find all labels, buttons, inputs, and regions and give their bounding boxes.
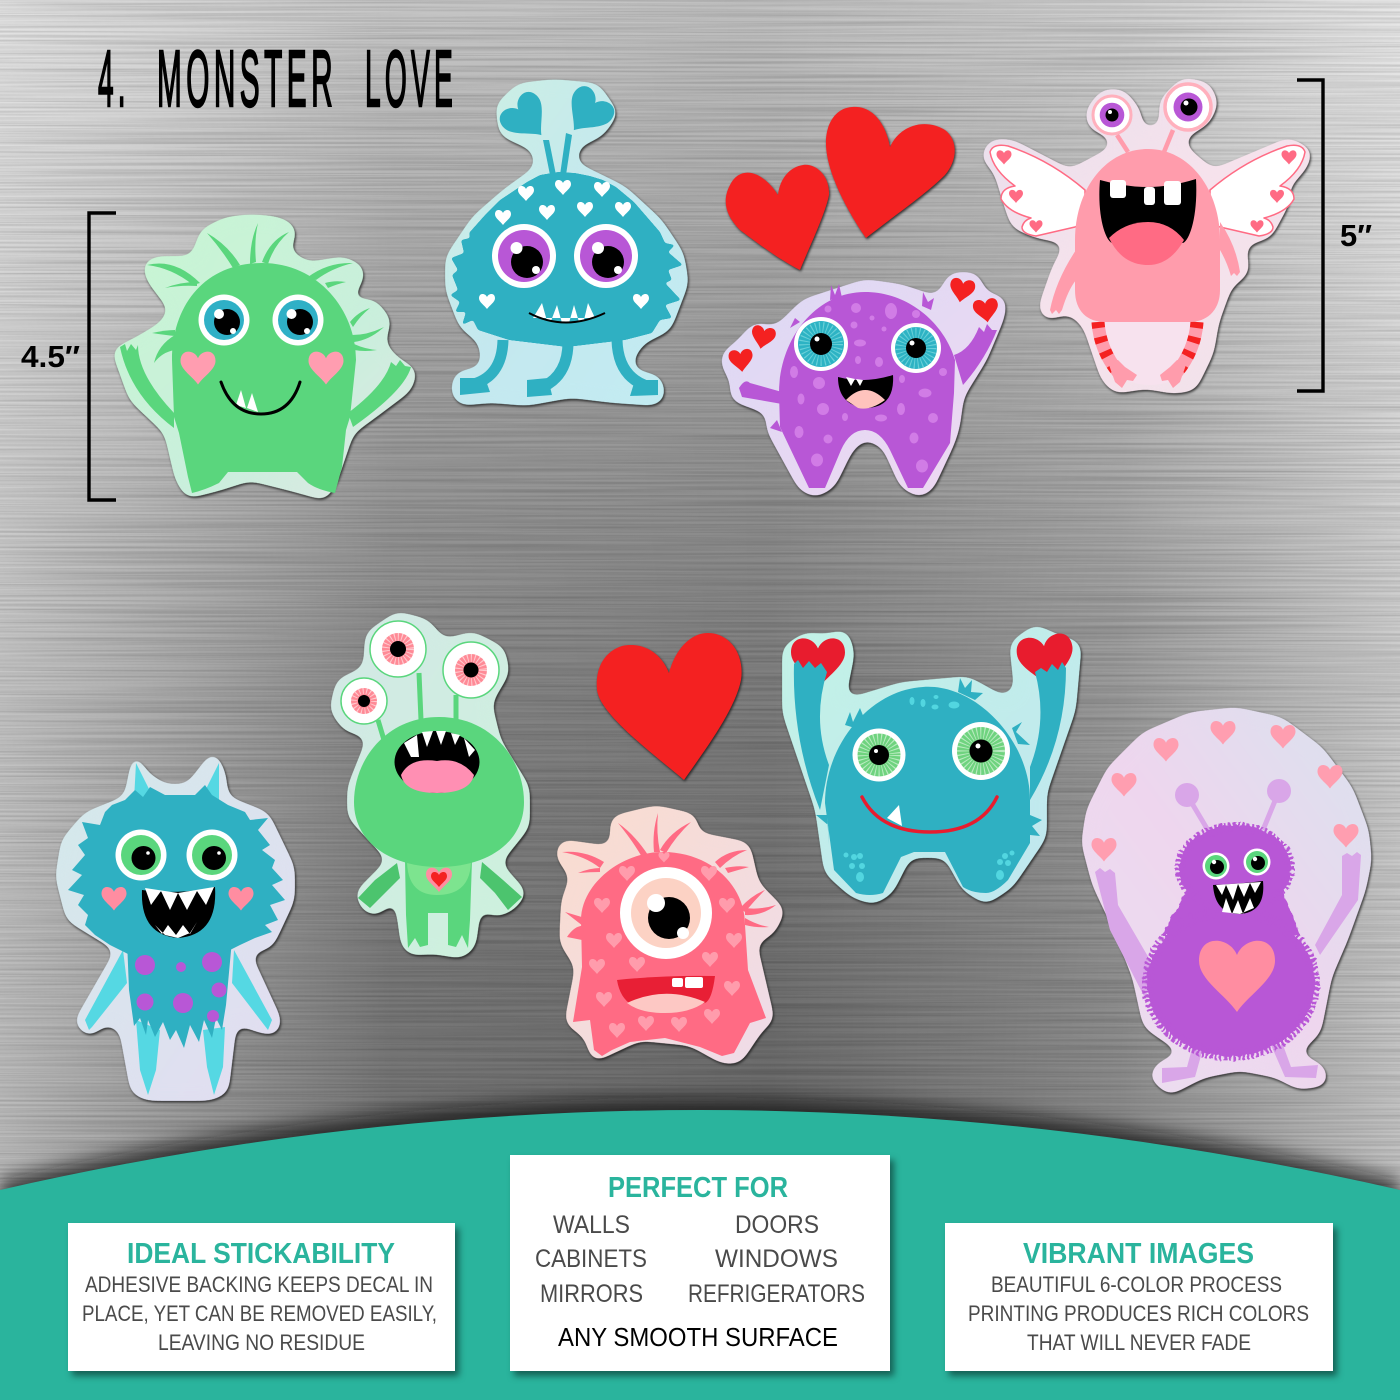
mouth: [838, 375, 893, 409]
belly: [407, 862, 471, 895]
eyes: [852, 722, 1010, 782]
antennae eyes: [1093, 84, 1211, 152]
toothy smile: [529, 303, 605, 323]
torso: [127, 940, 232, 1048]
sticker backing: [981, 78, 1312, 393]
heading: VIBRANT IMAGES: [1023, 1238, 1254, 1270]
held hearts: [791, 632, 1078, 692]
surfaces list: MIRRORS: [540, 1280, 643, 1308]
body: [816, 678, 1042, 895]
spots: [790, 303, 947, 472]
sticker backing: [112, 215, 417, 500]
body: [354, 717, 524, 867]
sticker backing: [56, 750, 294, 1100]
panel: ideal stickability: [68, 1223, 455, 1371]
dimension bracket: 5 inch: 5″: [1340, 218, 1372, 253]
body text: [82, 1272, 437, 1355]
panel background: [945, 1223, 1333, 1371]
sticker backing: [1082, 708, 1371, 1095]
mouth: [617, 976, 715, 1013]
smile: [221, 382, 300, 414]
body: [562, 813, 776, 1056]
surfaces list: WINDOWS: [715, 1245, 838, 1273]
sticker: pink one-eyed monster: [556, 806, 785, 1063]
furry body: [450, 172, 683, 347]
heading: PERFECT FOR: [608, 1172, 788, 1204]
eyes: [341, 621, 499, 724]
toothy mouth: [142, 887, 215, 938]
dimension bracket: 4.5 inch: [21, 213, 116, 500]
arms: [1050, 222, 1240, 314]
heading: IDEAL STICKABILITY: [127, 1238, 395, 1270]
feet: [460, 378, 658, 397]
panel: perfect for: [510, 1155, 890, 1371]
cheek hearts: [180, 352, 344, 384]
toothy mouth: [1213, 881, 1263, 914]
dimension bracket: 4.5 inch: 4.5″: [21, 339, 80, 374]
title: LOVE: [365, 34, 457, 123]
sticker: teal monster with heart antennae: [446, 80, 688, 405]
sticker: green monster: [112, 215, 417, 500]
closing line: ANY SMOOTH SURFACE: [558, 1322, 838, 1352]
smile: [862, 797, 997, 832]
sticker backing: [330, 612, 529, 958]
feet: [1108, 360, 1187, 388]
arms: [85, 950, 272, 1030]
body: [120, 223, 411, 493]
sticker backing: [722, 273, 1006, 497]
red hearts: [728, 277, 1000, 373]
sticker: pink winged monster: [981, 78, 1312, 393]
panel: vibrant images: [945, 1223, 1333, 1371]
sticker backing: [783, 625, 1081, 904]
surfaces list: WALLS: [553, 1211, 630, 1239]
heart pattern: [589, 852, 742, 1038]
wing hearts: [996, 150, 1296, 232]
sticker: purple monster: [722, 273, 1006, 497]
body text: LEAVING NO RESIDUE: [158, 1330, 365, 1355]
arms: [794, 660, 1066, 810]
teal arc band: [0, 1098, 1400, 1400]
arms: [358, 862, 522, 910]
mouth: [1099, 179, 1196, 265]
striped legs: [1098, 322, 1197, 372]
fuzzy body: [1147, 825, 1315, 1056]
surfaces list: DOORS: [735, 1211, 819, 1239]
sticker backing: [556, 806, 785, 1063]
surfaces list: [535, 1211, 865, 1308]
eyes: [1202, 848, 1270, 880]
legs: [470, 340, 650, 389]
eyes: [492, 224, 638, 288]
eyes: [198, 294, 324, 346]
sticker: teal monster holding hearts: [783, 625, 1081, 904]
big eye: [620, 867, 712, 959]
mouth: [394, 731, 480, 793]
belly heart: [426, 868, 452, 892]
horns: [134, 763, 219, 802]
sticker: purple fuzzy monster in egg: [1082, 708, 1371, 1095]
title: MONSTER: [157, 33, 337, 123]
title: [98, 33, 457, 123]
body: [739, 284, 997, 488]
body text: [968, 1272, 1309, 1355]
eye stalks: [378, 673, 456, 740]
title: 4.: [98, 34, 130, 123]
dimension bracket: 5 inch: [1297, 80, 1372, 391]
antennae hearts: [495, 82, 619, 175]
body: [1075, 149, 1220, 322]
eyes: [116, 830, 238, 880]
surfaces list: REFRIGERATORS: [688, 1280, 865, 1308]
red magnet heart: large: [826, 107, 955, 238]
red magnet heart: small: [726, 165, 829, 270]
sticker: blue furry monster: [56, 750, 294, 1100]
panel background: [510, 1155, 890, 1371]
legs: [136, 1020, 225, 1095]
eyes: [794, 317, 941, 373]
wings: [990, 145, 1305, 236]
red magnet heart: centre: [597, 633, 742, 780]
pink hearts: [1092, 721, 1358, 862]
body text: ADHESIVE BACKING KEEPS DECAL IN: [85, 1272, 433, 1297]
body text: PLACE, YET CAN BE REMOVED EASILY,: [82, 1301, 437, 1326]
sticker: green three-eyed alien: [330, 612, 529, 958]
surfaces list: CABINETS: [535, 1245, 647, 1273]
furry head: [68, 785, 285, 955]
purple spots: [135, 952, 226, 1022]
body hearts: [479, 180, 649, 309]
body text: BEAUTIFUL 6-COLOR PROCESS: [991, 1272, 1282, 1297]
sticker backing: [446, 80, 688, 405]
body text: PRINTING PRODUCES RICH COLORS: [968, 1301, 1309, 1326]
cheek hearts: [102, 887, 254, 910]
legs and torso: [405, 860, 472, 948]
body text: THAT WILL NEVER FADE: [1027, 1330, 1251, 1355]
belly: [1104, 322, 1197, 385]
spots: [844, 695, 1014, 882]
antennae, arms and legs: [1095, 779, 1361, 1083]
panel background: [68, 1223, 455, 1371]
body heart: [1199, 941, 1275, 1012]
